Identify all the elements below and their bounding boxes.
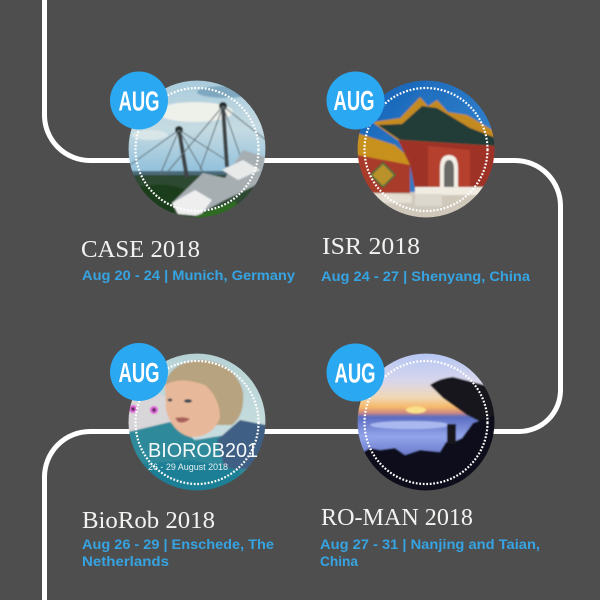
date and place, second line: China	[320, 553, 358, 569]
photo caption: event name: BIOROB201	[148, 440, 258, 462]
title: ISR 2018	[322, 233, 420, 260]
event: CASE 2018	[81, 72, 295, 283]
title: RO-MAN 2018	[321, 504, 473, 531]
event: ISR 2018	[321, 72, 530, 284]
date and place: Aug 20 - 24 | Munich, Germany	[82, 267, 295, 283]
month badge: AUG	[118, 86, 160, 116]
photo: Munich Olympic Park masts	[128, 80, 266, 222]
title: CASE 2018	[81, 236, 200, 263]
dotted ring	[136, 88, 258, 211]
date and place, second line: Netherlands	[82, 553, 169, 569]
date and place: Aug 24 - 27 | Shenyang, China	[321, 268, 530, 284]
month badge: AUG	[334, 85, 374, 116]
title: BioRob 2018	[82, 507, 215, 534]
date and place: Aug 26 - 29 | Enschede, The	[82, 536, 274, 552]
date and place: Aug 27 - 31 | Nanjing and Taian,	[320, 536, 540, 552]
month badge	[326, 344, 384, 402]
event: RO-MAN 2018	[320, 344, 540, 569]
photo: sunrise over clouds	[357, 353, 496, 492]
photo caption: dates: 26 - 29 August 2018	[148, 462, 228, 472]
photo: Shenyang palace gate	[357, 80, 496, 220]
month badge	[110, 343, 168, 401]
dotted ring	[364, 361, 488, 484]
month badge: AUG	[118, 357, 160, 388]
photo: child with robot	[127, 353, 266, 491]
event: BioRob 2018	[82, 343, 274, 569]
month badge	[110, 72, 168, 130]
dotted ring	[364, 88, 488, 211]
dotted ring	[136, 361, 258, 484]
month badge	[326, 72, 384, 130]
month badge: AUG	[334, 358, 376, 388]
